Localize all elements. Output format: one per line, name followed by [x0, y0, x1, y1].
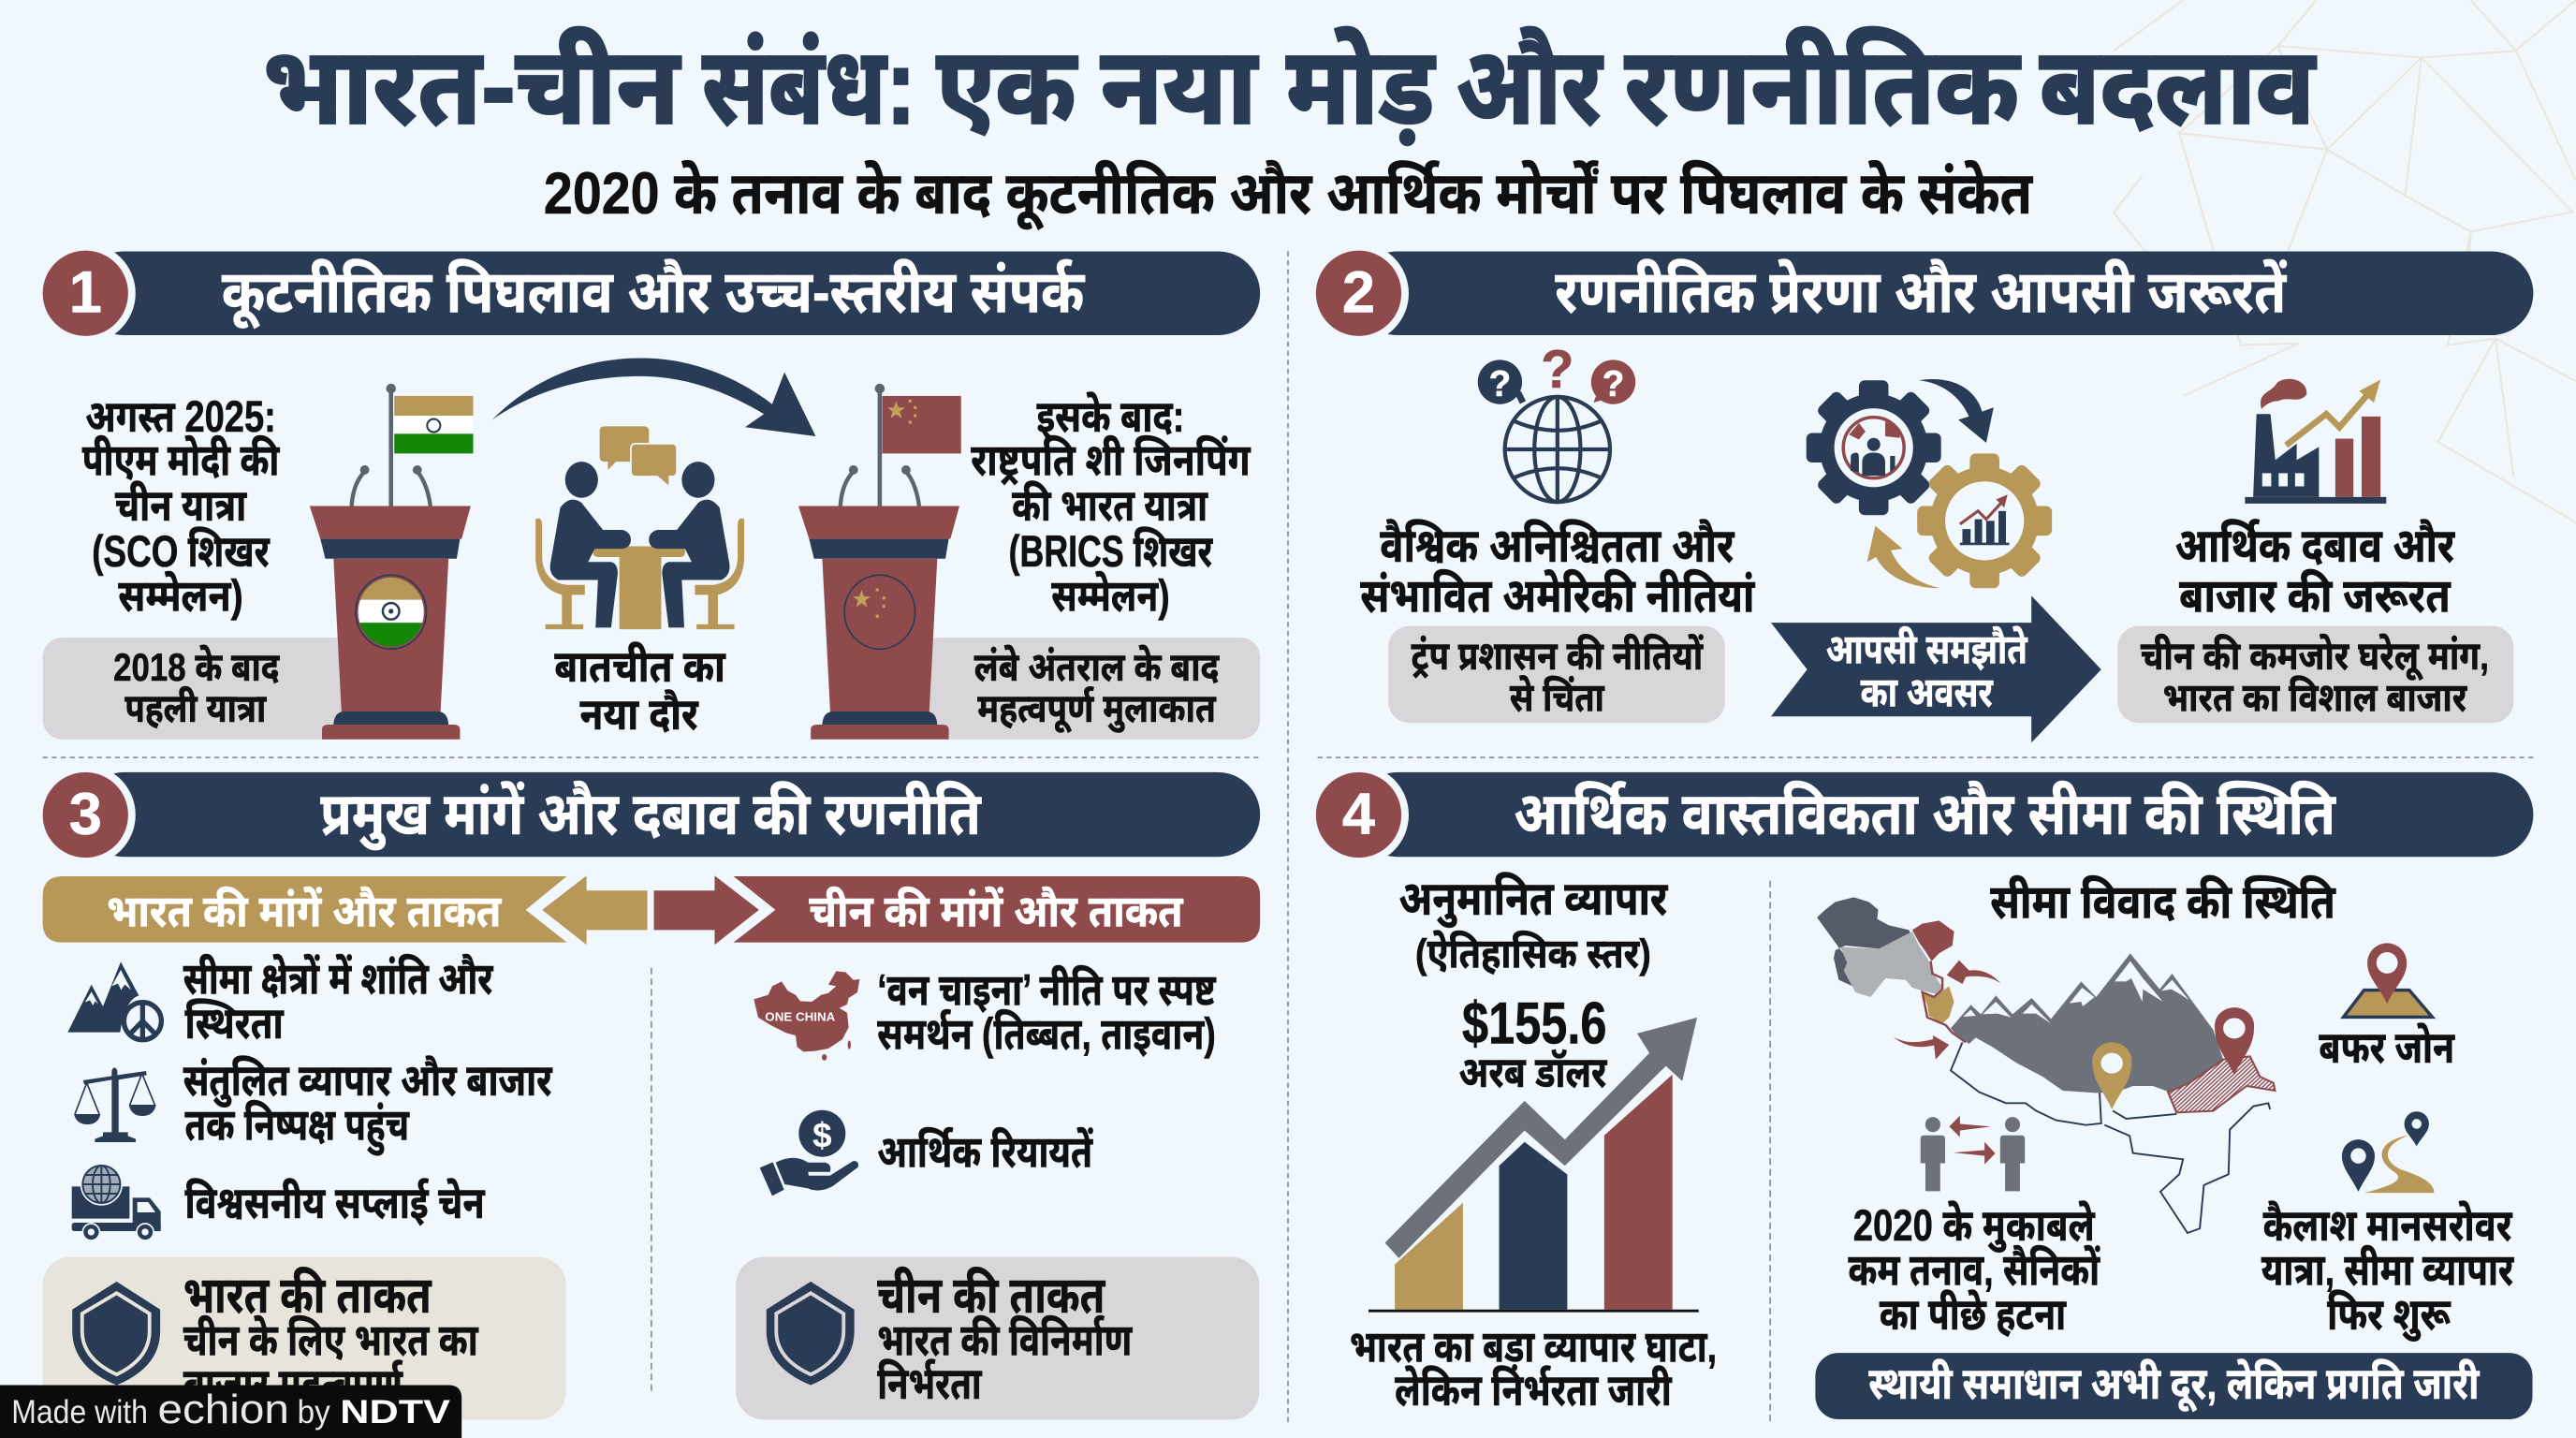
arrow: mutual agreement [1771, 595, 2101, 742]
text: Modi China visit [82, 392, 280, 622]
icon: gold gear [1917, 453, 2052, 588]
text: reduced tension: 2020 के मुकाबले [1853, 1199, 2096, 1253]
title [263, 28, 2317, 147]
note box right [920, 638, 1260, 740]
card: China strength: निर्भरता [877, 1358, 982, 1409]
text: demands of China: ‘वन चाइना’ नीति पर स्पष्ट [877, 965, 1217, 1016]
text: Kailash yatra: यात्रा, सीमा व्यापार [2261, 1244, 2514, 1295]
note box: Trump policies: से चिंता [1510, 676, 1605, 720]
icon: globe with question marks: ? [1603, 364, 1624, 404]
text: new round of talks [554, 641, 726, 740]
note box: China demand: चीन की कमजोर घरेलू मांग, [2141, 634, 2489, 681]
note box left: पहली यात्रा [124, 686, 268, 730]
text: Kailash yatra: फिर शुरू [2327, 1289, 2452, 1342]
note box right: लंबे अंतराल के बाद [974, 645, 1220, 689]
note box left [43, 638, 355, 740]
icon: China map: ONE CHINA [765, 1011, 835, 1024]
title: भारत-चीन [263, 28, 681, 147]
card: China strength: भारत की विनिर्माण [877, 1315, 1133, 1366]
text: trade deficit: लेकिन निर्भरता जारी [1395, 1364, 1673, 1416]
icon: truck with globe [72, 1163, 161, 1240]
section header 1 [36, 243, 1260, 344]
panel 4: economic reality and border [1309, 765, 2533, 1421]
text: new round of talks: बातचीत का [554, 641, 726, 692]
text: estimated trade [1398, 872, 1669, 976]
chat bubbles [600, 426, 677, 487]
panel 2: strategic motives [1309, 243, 2533, 742]
text: Modi China visit: पीएम मोदी की [82, 435, 280, 486]
banner: China demands [654, 875, 1260, 945]
card: India strength: भारत की ताकत [183, 1267, 432, 1324]
text: estimated trade: (ऐतिहासिक स्तर) [1415, 931, 1651, 976]
title: बदलाव [2040, 28, 2317, 147]
note box: China demand: भारत का विशाल बाजार [2163, 676, 2467, 720]
icon: China map [754, 971, 859, 1061]
text: global uncertainty: वैश्विक अनिश्चितता और [1380, 519, 1735, 572]
title: रणनीतिक [1625, 28, 2021, 147]
title: एक [936, 28, 1078, 147]
stat: trade value: $155.6 [1462, 990, 1606, 1056]
text: Xi India visit: सम्मेलन) [1051, 570, 1170, 622]
icon: globe with question marks: ? [1489, 364, 1511, 404]
curved arrow from India to China [492, 358, 815, 436]
text: economic pressure: बाजार की जरूरत [2179, 568, 2452, 622]
section header 3 [36, 765, 1260, 865]
text: Xi India visit: (BRICS शिखर [1009, 526, 1213, 577]
text: global uncertainty: संभावित अमेरिकी नीतियां [1360, 567, 1755, 622]
text: Modi China visit: सम्मेलन) [118, 570, 243, 622]
note box left: 2018 के बाद [113, 645, 280, 689]
note box right: महत्वपूर्ण मुलाकात [977, 686, 1217, 733]
text: reduced tension [1848, 1199, 2100, 1340]
panel 1: diplomatic thaw [36, 243, 1260, 740]
icon: balance scales [74, 1067, 156, 1142]
icon: navy gear [1807, 380, 1941, 515]
note box: China demand [2117, 626, 2513, 723]
heading: border dispute: सीमा विवाद की स्थिति [1990, 874, 2336, 928]
text: reduced tension: का पीछे हटना [1880, 1288, 2067, 1340]
arrow: mutual agreement: आपसी समझौते [1826, 627, 2027, 673]
chart: rising bars with arrow [1368, 1018, 1699, 1311]
icon: buffer zone pin [2344, 943, 2432, 1017]
text: demands of India: विश्वसनीय सप्लाई चेन [184, 1177, 485, 1228]
title: मोड़ [1286, 28, 1436, 147]
icon: soldiers pulling back [1921, 1116, 2025, 1191]
text: demands of India: संतुलित व्यापार और बाजार [183, 1055, 553, 1108]
icon: hand with dollar coin: $ [812, 1116, 832, 1154]
icon: two people at a table [535, 426, 744, 629]
text: economic pressure [2175, 519, 2455, 622]
text: demands of China: आर्थिक रियायतें [877, 1127, 1093, 1178]
text: demands of China [877, 965, 1217, 1178]
icon: globe with question marks [1478, 340, 1635, 503]
title: नया [1101, 28, 1259, 147]
text: trade deficit: भारत का बड़ा व्यापार घाटा, [1350, 1323, 1717, 1372]
text: Modi China visit: चीन यात्रा [115, 480, 247, 531]
text: trade deficit [1350, 1323, 1717, 1416]
text: Kailash yatra: कैलाश मानसरोवर [2263, 1199, 2512, 1251]
section header 2: 2 [1342, 259, 1375, 325]
section header 3: 3 [69, 782, 102, 847]
stat: trade value [1459, 990, 1607, 1096]
card: China strength [736, 1257, 1259, 1419]
text: Xi India visit: की भारत यात्रा [1012, 480, 1208, 531]
watermark: NDTV [340, 1394, 451, 1431]
text: Xi India visit: इसके बाद: [1036, 390, 1184, 442]
text: Modi China visit: (SCO शिखर [92, 526, 271, 577]
card: India strength: बाजार महत्वपूर्ण [183, 1359, 403, 1413]
podium: China [798, 384, 961, 740]
callout: progress continues [1815, 1353, 2532, 1419]
text: Kailash yatra [2261, 1199, 2514, 1342]
text: Xi India visit: राष्ट्रपति शी जिनपिंग [971, 435, 1251, 487]
text: Xi India visit [971, 390, 1251, 622]
section header 3: प्रमुख मांगें और दबाव की रणनीति [320, 781, 982, 850]
watermark: Made with [11, 1394, 148, 1431]
section header 4: आर्थिक वास्तविकता और सीमा की स्थिति [1514, 781, 2336, 847]
text: demands of India: तक निष्पक्ष पहुंच [184, 1100, 410, 1156]
text: new round of talks: नया दौर [580, 689, 699, 740]
text: demands of India [183, 952, 553, 1228]
arrow: navy gear loop [1919, 379, 1994, 443]
icon: hand with dollar coin [760, 1110, 858, 1196]
text: demands of India: स्थिरता [184, 998, 285, 1049]
arrow: mutual agreement: का अवसर [1861, 669, 1993, 715]
banner: India demands: भारत की मांगें और ताकत [107, 886, 503, 936]
section header 4: 4 [1342, 782, 1375, 847]
section header 1: कूटनीतिक पिघलाव और उच्च-स्तरीय संपर्क [222, 258, 1086, 329]
text: demands of China: समर्थन (तिब्बत, ताइवान) [877, 1009, 1216, 1060]
watermark: by [298, 1394, 330, 1431]
banner: China demands: चीन की मांगें और ताकत [809, 886, 1184, 936]
text: Modi China visit: अगस्त 2025: [85, 392, 276, 442]
arrow: gold gear loop [1867, 526, 1940, 588]
icon: factory and growth chart [2245, 379, 2386, 504]
icon: mountains and peace [67, 961, 161, 1040]
watermark [0, 1385, 461, 1438]
section header 1: 1 [69, 259, 102, 325]
banner: India demands [43, 875, 648, 945]
note box: Trump policies: ट्रंप प्रशासन की नीतियों [1412, 634, 1705, 679]
stat: trade value: अरब डॉलर [1459, 1049, 1607, 1096]
subtitle: 2020 के तनाव के बाद कूटनीतिक और आर्थिक मोर्चों पर पिघलाव के संकेत [544, 160, 2034, 230]
card: India strength [43, 1257, 566, 1419]
note box: Trump policies [1388, 626, 1725, 723]
watermark: echion [157, 1387, 289, 1432]
icon: route with pins [2342, 1111, 2434, 1193]
text: buffer zone: बफर जोन [2319, 1022, 2455, 1073]
card: China strength: चीन की ताकत [877, 1267, 1105, 1324]
section header 2 [1309, 243, 2533, 344]
text: estimated trade: अनुमानित व्यापार [1398, 872, 1669, 929]
map: India border with mountains and pins [1817, 897, 2275, 1233]
section header 4 [1309, 765, 2533, 865]
panel 3: key demands [36, 765, 1260, 1419]
text: reduced tension: कम तनाव, सैनिकों [1848, 1243, 2100, 1295]
icon: globe with question marks: ? [1541, 340, 1574, 400]
podium: India [310, 384, 473, 740]
card: India strength: चीन के लिए भारत का [183, 1314, 479, 1366]
title: संबंध: [702, 28, 915, 147]
section header 2: रणनीतिक प्रेरणा और आपसी जरूरतें [1555, 258, 2288, 325]
text: economic pressure: आर्थिक दबाव और [2175, 519, 2455, 572]
text: demands of India: सीमा क्षेत्रों में शांति और [183, 952, 493, 1004]
title: और [1456, 28, 1604, 147]
text: global uncertainty [1360, 519, 1755, 622]
